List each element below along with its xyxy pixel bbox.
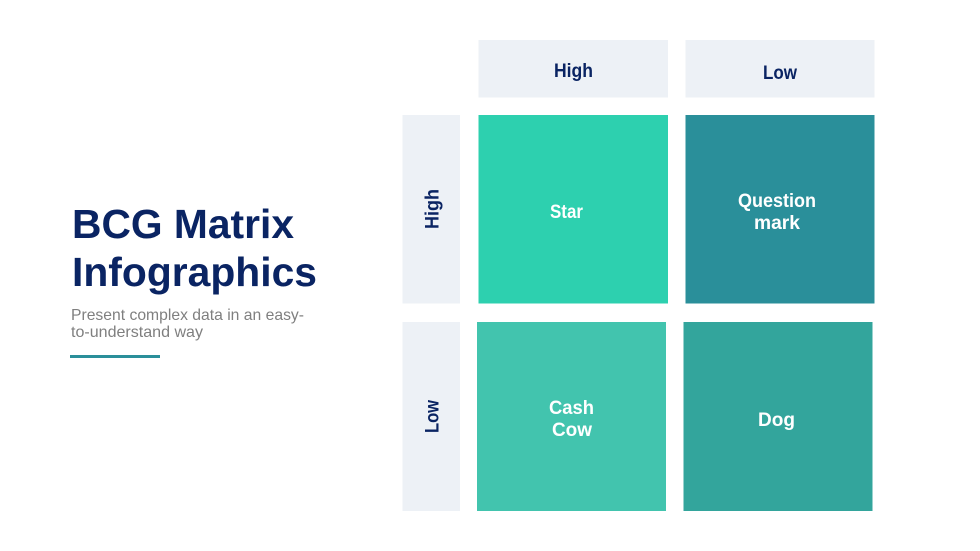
accent underline (70, 355, 160, 358)
row header: High (402, 115, 460, 304)
quadrant: Question mark: mark (754, 213, 800, 234)
quadrant: Star: Star (550, 202, 584, 223)
column header: Low (686, 40, 874, 98)
row header: Low (402, 322, 460, 511)
title (72, 201, 317, 295)
row header: High: High (422, 189, 444, 229)
quadrant: Question mark (686, 115, 874, 304)
quadrant: Dog (684, 322, 872, 511)
quadrant: Cash Cow: Cash (549, 398, 594, 419)
title: Infographics (72, 249, 317, 295)
quadrant: Cash Cow (477, 322, 666, 511)
quadrant: Star (478, 115, 668, 304)
subtitle text (71, 307, 304, 341)
subtitle text: to-understand way (71, 324, 203, 341)
quadrant: Question mark: Question (738, 191, 816, 212)
subtitle text: Present complex data in an easy- (71, 307, 304, 324)
column header: High (478, 40, 668, 98)
row header: Low: Low (422, 400, 444, 433)
quadrant: Cash Cow: Cow (552, 420, 592, 441)
column header: High: High (554, 61, 593, 82)
column header: Low: Low (763, 63, 797, 84)
title: BCG Matrix (72, 201, 294, 247)
quadrant: Dog: Dog (758, 410, 795, 431)
